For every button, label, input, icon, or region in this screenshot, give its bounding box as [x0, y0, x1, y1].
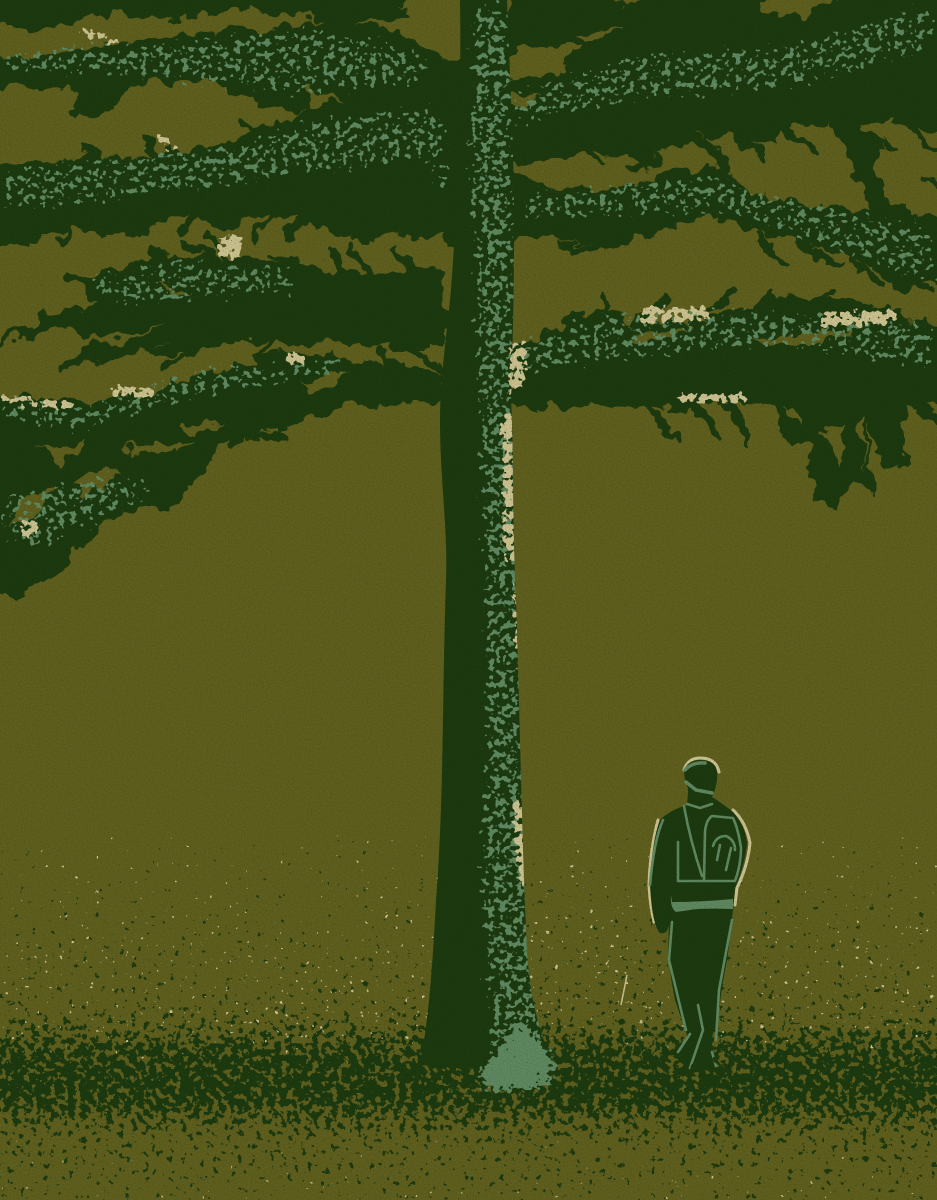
foliage: dark branches	[0, 0, 937, 602]
figure: cream halo	[649, 758, 750, 922]
branch: lower right hanging clump	[770, 400, 905, 508]
figure: ground reed	[621, 975, 627, 1005]
figure: leg highlights	[669, 920, 732, 1068]
foliage: green stipple highlights	[0, 0, 937, 550]
branch: lower left upper tier	[0, 255, 445, 364]
foreground: stipple over the feet	[655, 1060, 745, 1090]
figure: cap highlight	[685, 763, 712, 793]
figure: walker with backpack	[621, 758, 750, 1073]
trunk root flare	[478, 1015, 562, 1092]
branch: top left fringe	[0, 0, 415, 30]
ground: stippled shadow and speckles	[0, 830, 937, 1200]
trunk	[420, 0, 565, 1092]
branch: middle right	[505, 168, 937, 292]
figure: waist band	[671, 895, 733, 912]
branch: upper right mass	[505, 0, 937, 165]
branch: upper left	[0, 22, 465, 250]
figure: dark silhouette	[650, 760, 747, 1073]
needles: right side	[530, 5, 937, 440]
foliage: cream highlights	[0, 25, 900, 540]
figure: backpack outlines	[650, 804, 741, 885]
holes: olive gaps in foliage	[10, 0, 925, 530]
branch: drooping lower left	[0, 350, 445, 602]
needles: left side	[0, 90, 440, 590]
branch: lower right	[505, 295, 937, 410]
branch: right limb	[832, 118, 918, 222]
